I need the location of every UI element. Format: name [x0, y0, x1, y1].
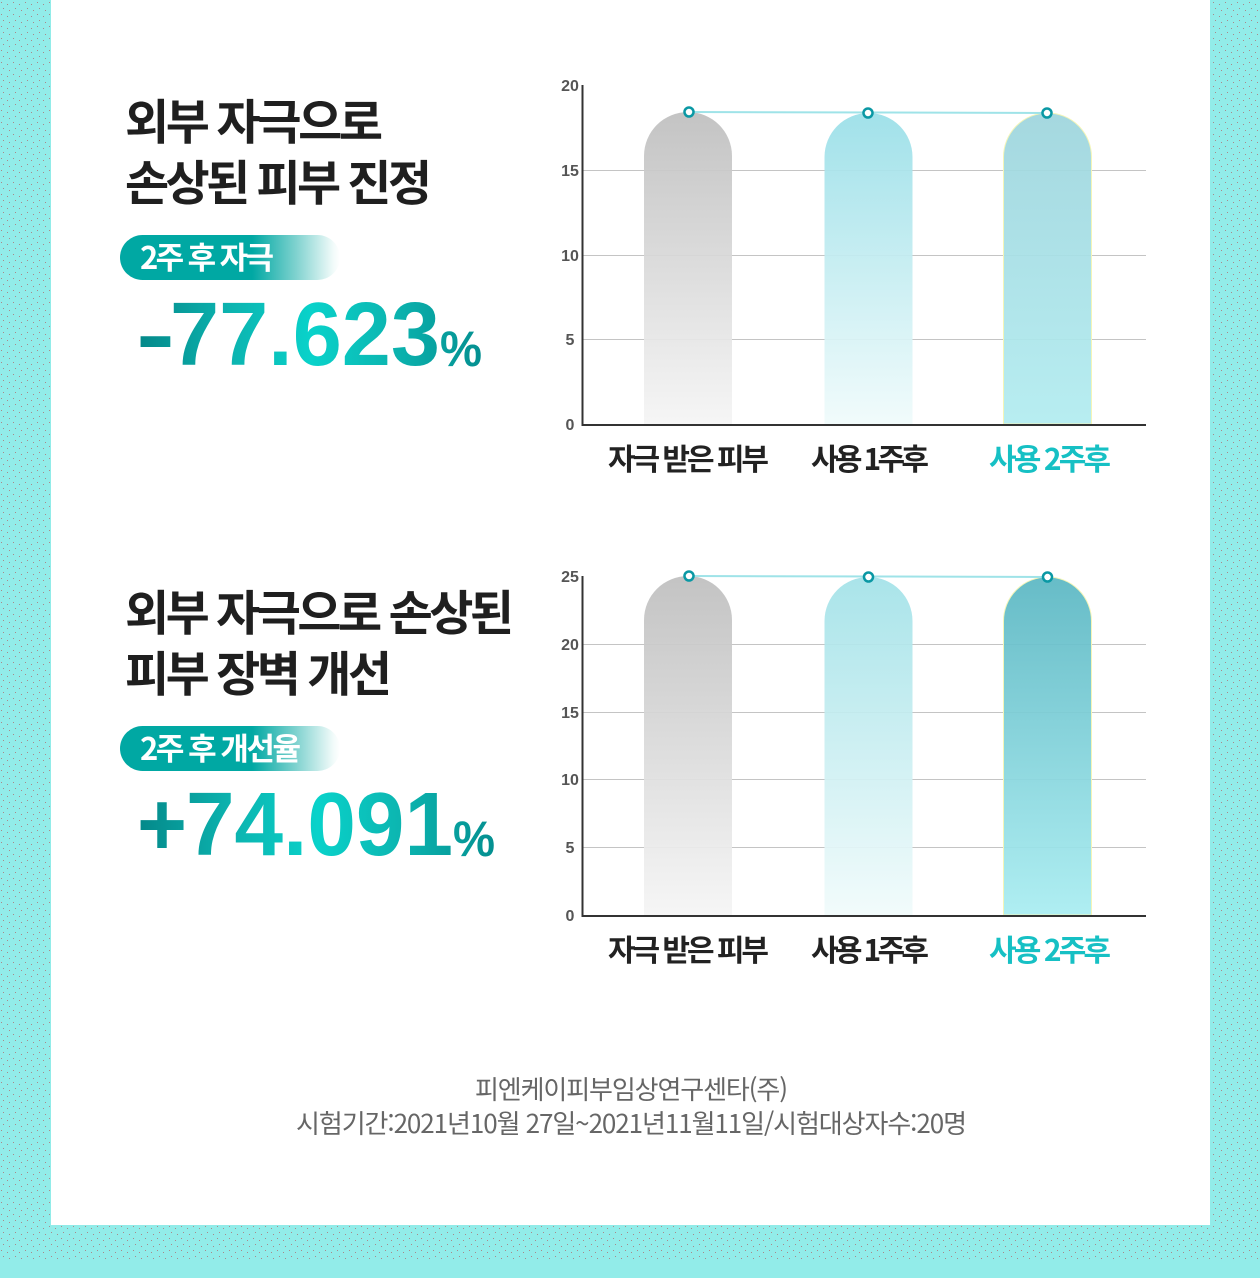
heading: section 2 — [125, 574, 514, 705]
section 2: barrier improvement — [120, 574, 514, 875]
bar chart 2 — [561, 569, 1146, 970]
big number: +74.091%: % — [453, 811, 495, 867]
y axis labels — [561, 569, 579, 925]
y axis labels: 15 — [561, 705, 579, 722]
big number: -77.623%: - — [136, 285, 175, 385]
footnote: 시험기간:2021년10월 27일~2021년11월11일/시험대상자수:20명 — [296, 1104, 967, 1141]
y axis labels: 0 — [566, 908, 575, 925]
badge: 2 weeks irritation: 2주 후 자극 — [140, 233, 274, 278]
x axis labels: 사용 2주후 — [989, 926, 1111, 970]
big number: -77.623%: 77.623 — [170, 285, 440, 385]
section 1: soothing result — [120, 83, 482, 385]
y axis labels: 5 — [566, 840, 575, 857]
x axis labels: 자극 받은 피부 — [608, 435, 769, 479]
y axis labels: 15 — [561, 163, 579, 180]
trend line with markers — [684, 572, 1052, 582]
footnote — [296, 1070, 967, 1141]
y axis labels: 20 — [561, 78, 579, 95]
bar: irritated skin — [644, 112, 732, 424]
bar: after 2 weeks — [1004, 113, 1092, 424]
heading: section 1: 손상된 피부 진정 — [125, 144, 432, 214]
x axis labels: 사용 1주후 — [811, 926, 929, 970]
y axis labels: 10 — [561, 248, 579, 265]
heading: section 2: 피부 장벽 개선 — [125, 635, 392, 705]
y axis labels — [561, 78, 579, 434]
bar: after 2 weeks — [1004, 577, 1092, 915]
x axis labels: 사용 2주후 — [989, 435, 1111, 479]
heading: section 2: 외부 자극으로 손상된 — [125, 574, 514, 644]
heading: section 1: 외부 자극으로 — [125, 83, 383, 153]
x axis labels — [608, 435, 1111, 479]
badge: 2 weeks improvement: 2주 후 개선율 — [140, 724, 301, 769]
bar: after 1 week — [824, 113, 912, 424]
big number: -77.623%: % — [440, 321, 482, 377]
badge: 2 weeks irritation — [120, 233, 340, 280]
y axis labels: 10 — [561, 772, 579, 789]
y axis labels: 5 — [566, 332, 575, 349]
heading: section 1 — [125, 83, 432, 214]
x axis labels: 사용 1주후 — [811, 435, 929, 479]
big number: +74.091%: 74.091 — [186, 775, 453, 875]
bar: irritated skin — [644, 576, 732, 915]
trend line with markers — [684, 108, 1052, 118]
bar: after 1 week — [824, 577, 912, 915]
footnote: 피엔케이피부임상연구센타(주) — [475, 1070, 788, 1107]
x axis labels — [608, 926, 1111, 970]
x axis labels: 자극 받은 피부 — [608, 926, 769, 970]
y axis labels: 0 — [566, 417, 575, 434]
y axis labels: 20 — [561, 637, 579, 654]
bar chart 1 — [561, 78, 1146, 479]
y axis labels: 25 — [561, 569, 579, 586]
big number: +74.091%: + — [137, 775, 187, 875]
